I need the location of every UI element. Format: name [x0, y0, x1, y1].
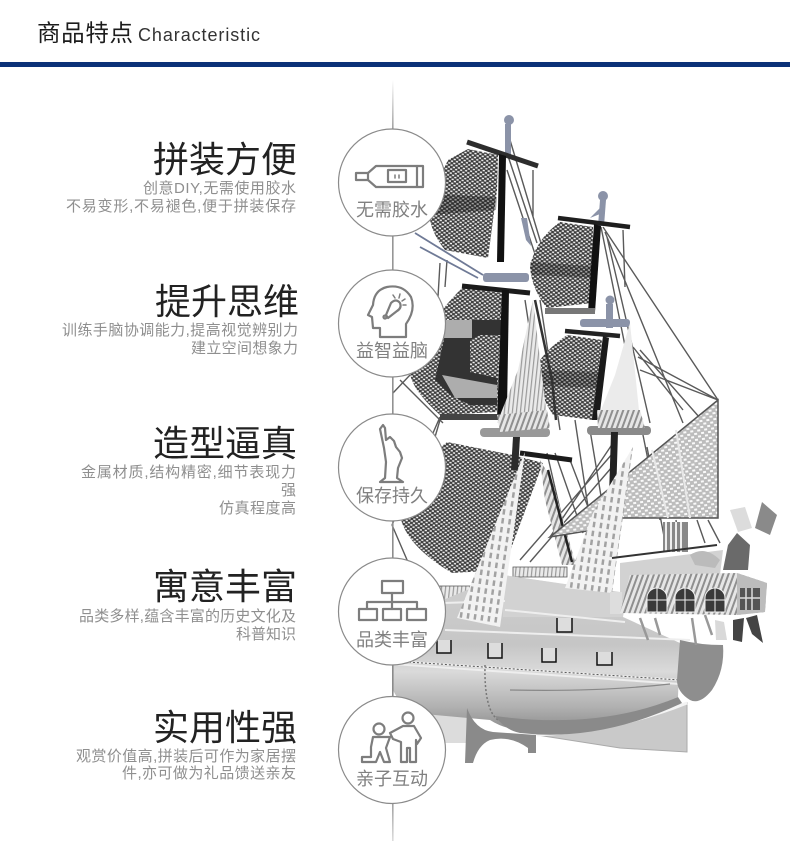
hanging figures — [640, 615, 763, 645]
icon: parent and child — [362, 712, 421, 762]
hull — [393, 575, 680, 731]
stern rudder — [677, 640, 723, 701]
description: 不易变形,不易褪色,便于拼装保存 — [66, 198, 296, 215]
badge — [338, 558, 446, 665]
ship illustration — [392, 115, 777, 763]
feature: meaning — [79, 558, 446, 665]
badge — [338, 414, 446, 521]
badge label: 无需胶水 — [356, 200, 428, 220]
sail: top left — [430, 149, 498, 258]
gun ports — [437, 618, 612, 665]
sail: fore ladder left — [457, 452, 525, 627]
badge label: 益智益脑 — [356, 341, 428, 361]
stand left plate — [393, 700, 468, 743]
icon: head with bulb — [368, 286, 413, 337]
description: 仿真程度高 — [219, 499, 296, 517]
description: 观赏价值高,拼装后可作为家居摆 — [76, 748, 296, 765]
sail: fore ladder right — [565, 447, 633, 593]
description: 品类多样,蕴含丰富的历史文化及 — [79, 607, 296, 625]
rigging lines — [392, 140, 720, 590]
center axis line — [392, 80, 394, 841]
description — [81, 464, 296, 517]
stand foot — [465, 708, 536, 763]
sail: light fore panels upper — [497, 300, 547, 423]
description — [62, 322, 298, 357]
description: 金属材质,结构精密,细节表现力 — [81, 464, 296, 481]
badge — [338, 270, 446, 377]
description: 训练手脑协调能力,提高视觉辨别力 — [62, 322, 298, 339]
description: 件,亦可做为礼品馈送亲友 — [122, 765, 296, 782]
feature: practical — [76, 696, 446, 804]
badge — [338, 696, 446, 804]
stern windows — [647, 588, 725, 612]
icon: statue — [380, 425, 403, 482]
description — [79, 607, 296, 643]
header title — [37, 20, 260, 46]
sail: middle right — [533, 335, 602, 420]
heading: 造型逼真 — [153, 423, 297, 464]
stern deck line — [612, 545, 717, 558]
description: 强 — [281, 482, 296, 499]
sail: triangular jib — [550, 400, 718, 537]
deck railing — [440, 567, 567, 600]
description: 创意DIY,无需使用胶水 — [143, 179, 296, 197]
description: 建立空间想象力 — [191, 340, 298, 357]
feature: thinking — [62, 270, 446, 377]
sail: top right — [530, 222, 593, 308]
badge label: 保存持久 — [356, 486, 428, 506]
heading: 寓意丰富 — [153, 566, 297, 607]
stern ornament — [690, 502, 777, 570]
blue-grey stays — [415, 233, 483, 278]
stand rear plate — [537, 703, 687, 752]
sail: bottom left — [400, 442, 543, 573]
badge label: 品类丰富 — [356, 630, 428, 650]
stern cabin — [620, 573, 767, 615]
icon: glue tube — [356, 166, 423, 187]
badge label: 亲子互动 — [356, 769, 428, 789]
mast tops — [480, 115, 651, 437]
heading: 拼装方便 — [153, 139, 297, 180]
header title: 商品特点 — [37, 20, 133, 46]
feature: realistic — [81, 414, 446, 521]
header rule — [0, 62, 790, 67]
description — [76, 748, 296, 782]
heading: 提升思维 — [155, 281, 299, 322]
description: 科普知识 — [236, 626, 296, 643]
badge — [338, 129, 446, 236]
header title: Characteristic — [138, 25, 260, 45]
icon: org chart — [359, 581, 426, 620]
heading: 实用性强 — [153, 707, 297, 748]
sail: middle left — [410, 288, 502, 415]
description — [66, 179, 296, 215]
feature: easy assembly — [66, 129, 446, 236]
